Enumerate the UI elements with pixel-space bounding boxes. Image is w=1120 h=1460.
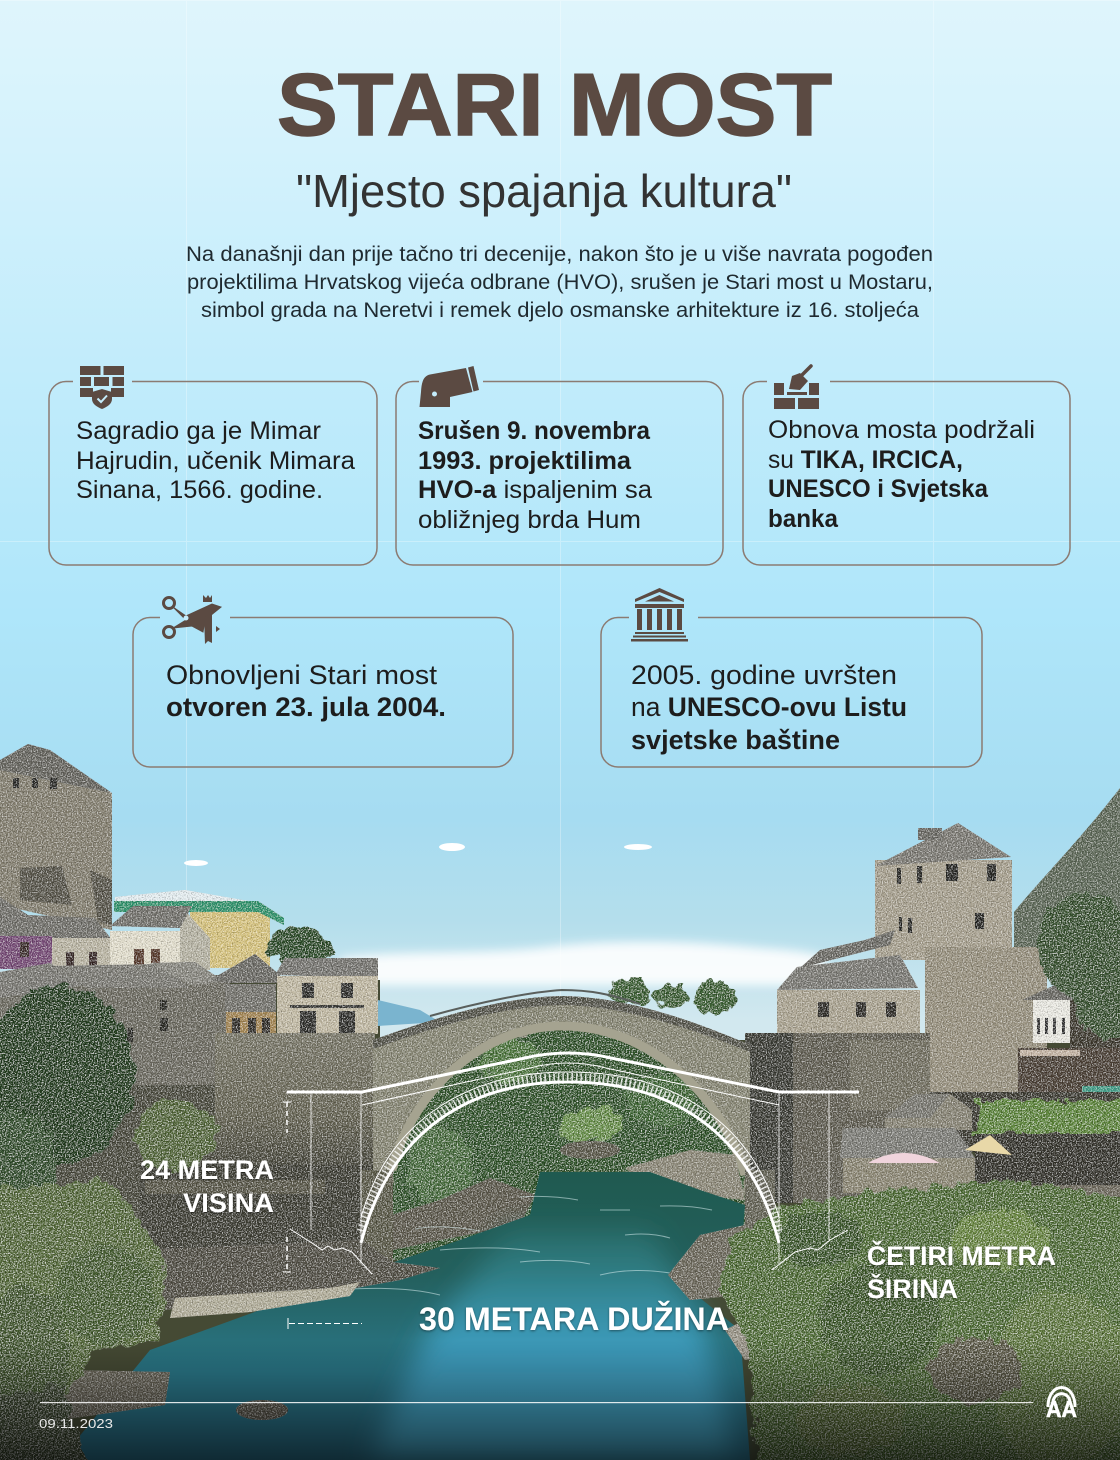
photo: view through the arch — [392, 1026, 745, 1262]
label: height — [140, 1155, 274, 1218]
icon: scissors cutting ribbon — [164, 595, 221, 644]
label: height: 24 METRA — [140, 1155, 274, 1185]
roof over purple house — [0, 897, 112, 940]
label: width — [867, 1240, 1056, 1304]
subtitle: "Mjesto spajanja kultura" — [296, 165, 792, 217]
purple house — [0, 936, 52, 969]
icon: brick wall with check shield — [80, 366, 124, 409]
text: reconstruction support: banka — [768, 505, 839, 533]
icon: classical temple — [631, 588, 688, 642]
photo: mountain on the right — [1014, 788, 1120, 960]
text: unesco: 2005. godine uvršten — [631, 660, 897, 690]
text: builder: Sagradio ga je Mimar — [76, 417, 321, 445]
photo: bridge railing and people — [430, 990, 640, 1016]
photo: distant hills through the gap — [378, 1000, 440, 1026]
logo: AA: AA — [1046, 1396, 1077, 1422]
panel: unesco — [601, 588, 982, 767]
lower wall right of bridge — [745, 1033, 930, 1203]
photo: river — [60, 1172, 750, 1460]
photo: right tree — [1037, 893, 1120, 1038]
low stone house — [777, 990, 920, 1040]
photo: right foliage — [720, 1180, 1120, 1460]
water ripples — [335, 1196, 712, 1295]
thin parapet line — [362, 1063, 779, 1105]
photo: trees behind the bridge — [608, 979, 736, 1014]
label: width: ČETIRI METRA — [867, 1240, 1056, 1271]
dashed length mark — [289, 1322, 362, 1324]
verticals — [311, 1092, 829, 1262]
rocks inside the arch — [392, 1141, 745, 1250]
white house — [110, 931, 180, 968]
photo: bottom darkening — [0, 1340, 1120, 1460]
deck outline — [287, 1053, 859, 1092]
text: destruction: Srušen 9. novembra — [418, 417, 651, 445]
pale wall — [52, 938, 112, 968]
panel: builder — [49, 366, 377, 565]
text: reconstruction support: Obnova mosta podržali — [768, 416, 1035, 444]
left stone tower — [0, 744, 112, 930]
intro paragraph — [186, 243, 933, 322]
text: destruction: 1993. projektilima — [418, 447, 632, 475]
text: destruction: HVO-a ispaljenim sa — [418, 476, 652, 504]
faint guide lines — [0, 0, 1120, 1000]
panel: destruction — [396, 366, 723, 565]
text: reconstruction support — [768, 416, 1035, 533]
intro paragraph: Na današnji dan prije tačno tri decenije, nakon što je u više navrata pogođen — [186, 243, 933, 266]
label: width: ŠIRINA — [867, 1273, 958, 1304]
text: destruction: obližnjeg brda Hum — [418, 506, 641, 534]
text: destruction — [418, 417, 652, 534]
icon: trowel and bricks — [774, 366, 819, 409]
footer line — [40, 1402, 1033, 1403]
ground squiggles — [290, 1229, 372, 1274]
title: STARI MOST — [277, 55, 832, 154]
photo: left old town buildings — [0, 744, 284, 970]
text: reconstruction support: UNESCO i Svjetska — [768, 475, 989, 503]
icon: cannon — [420, 366, 479, 407]
small windows in purple and pale walls — [20, 942, 97, 966]
bridge measurement overlay — [283, 1053, 859, 1329]
dashed height marks — [286, 1102, 288, 1272]
date: 09.11.2023 — [39, 1416, 113, 1431]
photo: dark base ground — [0, 980, 1120, 1460]
text: reconstruction support: su TIKA, IRCICA, — [768, 446, 963, 474]
photo: right tower group — [745, 823, 1120, 1203]
arch with hatching — [361, 1072, 779, 1243]
yellow pavilion — [190, 910, 270, 968]
text: unesco: na UNESCO-ovu Listu — [631, 692, 907, 722]
text: reopening: Obnovljeni Stari most — [166, 660, 438, 690]
intro paragraph: simbol grada na Neretvi i remek djelo osmanske arhitekture iz 16. stoljeća — [201, 299, 919, 322]
photo: stone bridge — [362, 996, 750, 1260]
text: reopening — [166, 660, 446, 722]
photo: right terrace foliage and small houses — [840, 1092, 1120, 1245]
tree behind houses — [268, 927, 332, 967]
text: unesco: svjetske baštine — [631, 725, 840, 755]
intro paragraph: projektilima Hrvatskog vijeća odbrane (HVO), srušen je Stari most u Mostaru, — [187, 271, 933, 294]
text: unesco — [631, 660, 907, 755]
panel: reconstruction support — [743, 366, 1070, 565]
clouds in the sky — [184, 843, 830, 985]
white house on right — [1022, 985, 1075, 1000]
photo: left roof row and walls — [0, 954, 378, 1275]
big stone bastion — [925, 947, 1047, 1097]
text: builder: Hajrudin, učenik Mimara — [76, 447, 355, 475]
photo: left trees and foliage — [0, 985, 217, 1460]
text: reopening: otvoren 23. jula 2004. — [166, 692, 446, 722]
panel: reopening — [133, 595, 513, 767]
tall round tower — [875, 823, 1012, 960]
photo: left shore and rocks — [60, 1240, 440, 1420]
photo: right shore rocks — [668, 1225, 790, 1360]
main left riverside wall — [215, 1033, 375, 1183]
photo: bridge pillars — [360, 1170, 775, 1268]
text: builder — [76, 417, 355, 504]
label: height: VISINA — [183, 1188, 274, 1218]
text: builder: Sinana, 1566. godine. — [76, 476, 323, 504]
label: length: 30 METARA DUŽINA — [419, 1301, 729, 1337]
